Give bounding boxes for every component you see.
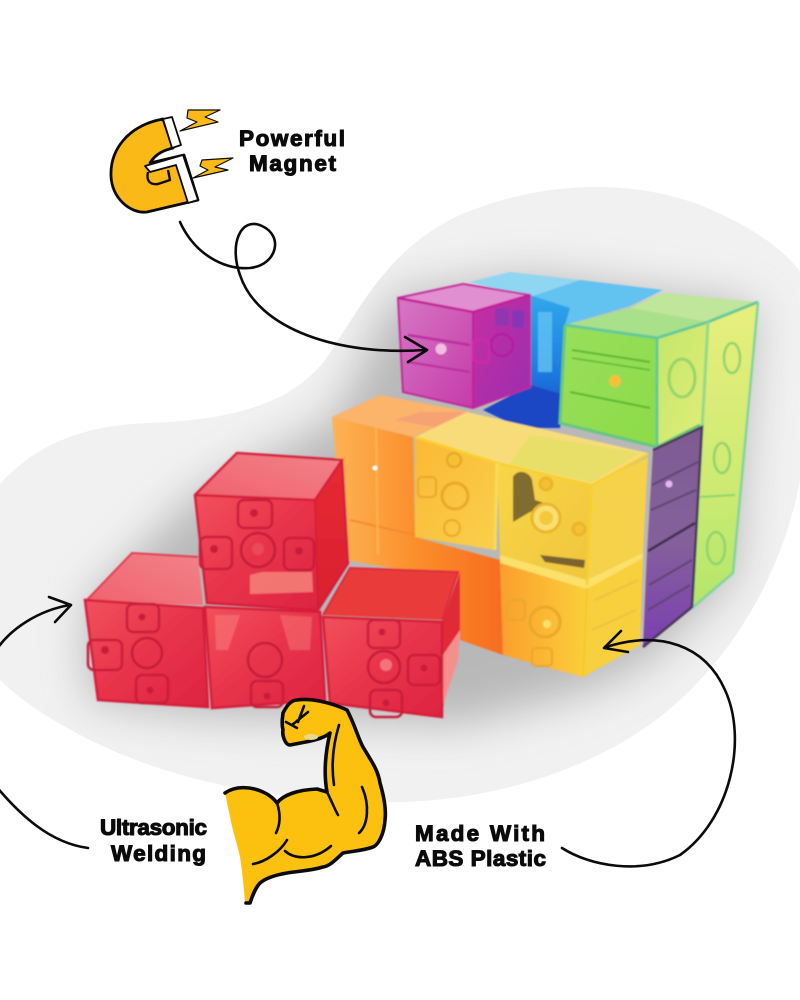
icon: flexed arm xyxy=(225,699,385,903)
label: Ultrasonic Welding: Welding xyxy=(111,841,206,866)
red tetromino block xyxy=(85,453,460,717)
cube: purple block xyxy=(643,427,702,647)
label: Powerful Magnet xyxy=(239,126,345,176)
cube: yellow blocks xyxy=(415,412,648,677)
icon: top lightning bolt xyxy=(180,110,220,131)
red middle cube xyxy=(205,607,325,708)
infographic canvas xyxy=(0,109,800,905)
icon: lower lightning bolt xyxy=(193,158,233,178)
label: Ultrasonic Welding: Ultrasonic xyxy=(100,815,207,840)
cube: orange block xyxy=(332,395,503,655)
label: Powerful Magnet: Magnet xyxy=(249,151,336,176)
red top cube xyxy=(195,453,348,610)
background blob xyxy=(0,187,800,802)
label: Made With ABS Plastic: ABS Plastic xyxy=(415,846,546,871)
cube: magenta block xyxy=(398,284,530,408)
arrow: ultrasonic welding to red block xyxy=(0,597,88,848)
red right cube xyxy=(323,568,460,717)
icon: horseshoe magnet G with lightning xyxy=(111,110,233,212)
cube photo group xyxy=(85,272,758,717)
label: Ultrasonic Welding xyxy=(100,815,207,866)
arrow: ABS plastic to yellow cube xyxy=(562,631,735,866)
cube: blue back block xyxy=(470,272,663,428)
label: Made With ABS Plastic xyxy=(415,821,546,871)
label: Powerful Magnet: Powerful xyxy=(239,126,345,151)
red left cube xyxy=(85,553,208,707)
arrow: magnet to magenta cube xyxy=(180,222,427,362)
label: Made With ABS Plastic: Made With xyxy=(415,821,545,846)
cube: green block xyxy=(560,293,758,608)
